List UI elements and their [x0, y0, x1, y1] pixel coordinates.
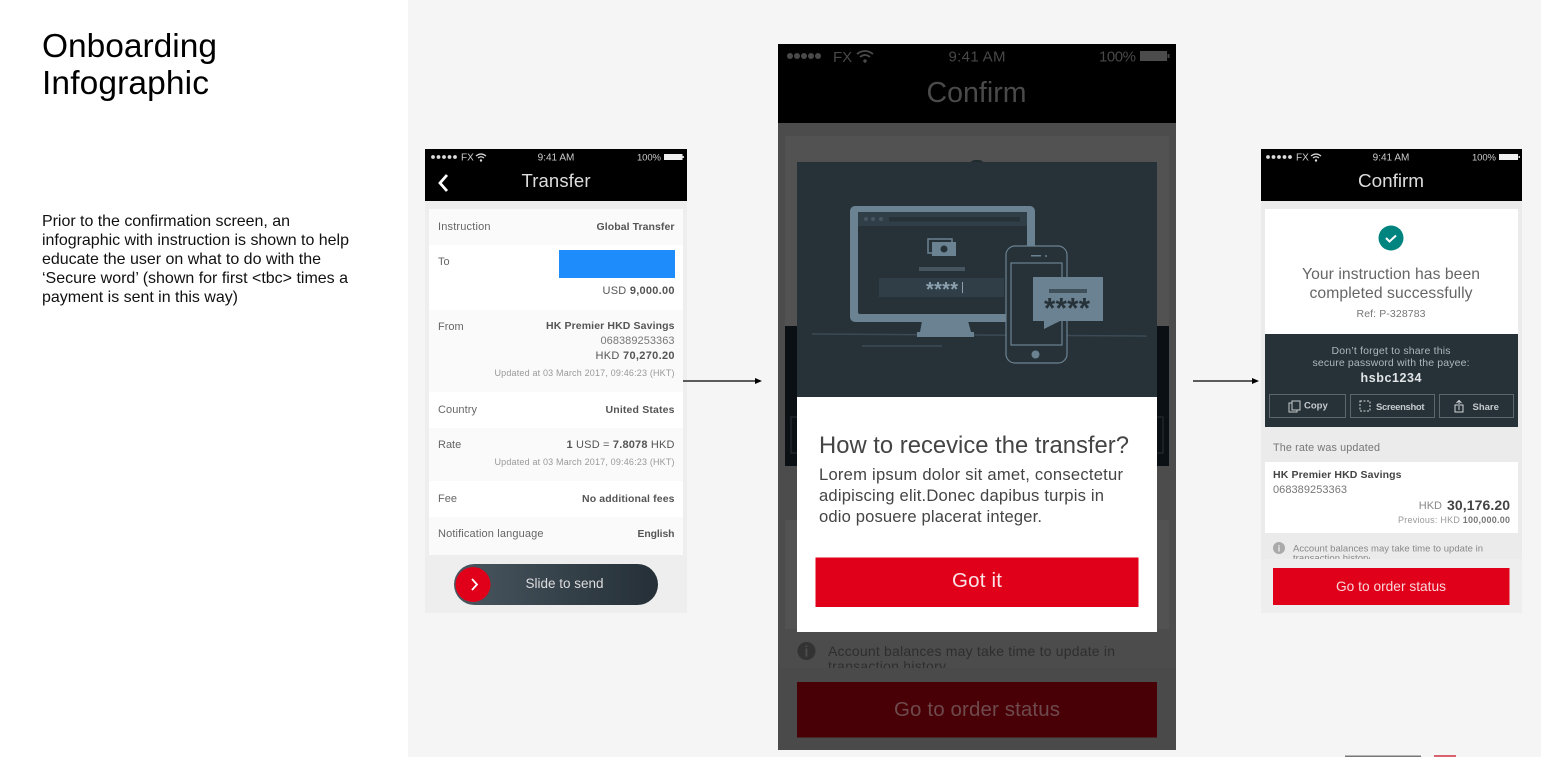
row values: [494, 221, 675, 540]
table rows: [429, 209, 683, 555]
header: confirm dimmed: Confirm: [926, 77, 1026, 109]
dimmed screen background: [778, 136, 1176, 750]
panel: transfer phone screen: [425, 149, 687, 613]
phone: [1006, 246, 1067, 363]
button: share: [1440, 394, 1514, 418]
text block: description: infographic with instruction is shown to help: [42, 232, 349, 249]
header: confirm: [1261, 149, 1522, 201]
account card: HK Premier HKD Savings: [1273, 469, 1402, 481]
row values: HKD 70,270.20: [596, 350, 674, 362]
button: share: Share: [1472, 402, 1499, 413]
header: confirm dimmed: FX: [833, 49, 852, 66]
row labels: Rate: [438, 439, 461, 451]
account card: 068389253363: [1273, 484, 1347, 496]
modal body text: adipiscing elit.Donec dapibus turpis in: [819, 486, 1104, 505]
arrow: first to second screen: [683, 378, 762, 384]
title: Infographic: [42, 65, 209, 102]
success card: completed successfully: [1310, 285, 1473, 302]
row labels: [438, 221, 544, 540]
row labels: From: [438, 321, 464, 333]
info note: transaction history: [1293, 553, 1371, 564]
header: confirm dimmed: 9:41 AM: [948, 48, 1006, 66]
row values: Updated at 03 March 2017, 09:46:23 (HKT): [494, 457, 674, 467]
account card: [1265, 462, 1518, 533]
header: transfer: Transfer: [522, 170, 590, 191]
title: [42, 28, 217, 102]
row labels: Fee: [438, 493, 457, 505]
title: Onboarding: [42, 28, 217, 65]
row values: USD 9,000.00: [602, 285, 674, 297]
success card: [1265, 209, 1518, 334]
text block: description: Prior to the confirmation screen, an: [42, 213, 290, 230]
row values: HK Premier HKD Savings: [546, 320, 675, 332]
illustration: monitor and phone with secure word: [797, 162, 1157, 397]
row labels: Instruction: [438, 221, 490, 233]
modal body text: odio posuere placerat integer.: [819, 507, 1042, 526]
dimmed screen background: Go to order status: [894, 698, 1060, 721]
button: go to order status: [1261, 559, 1522, 613]
success card: Ref: P-328783: [1356, 308, 1426, 320]
text block: description: educate the user on what to do with the: [42, 251, 321, 268]
dimmed screen background: transaction history: [828, 658, 946, 674]
icon: check: [1378, 226, 1404, 250]
row labels: Country: [438, 404, 478, 416]
button: copy: Copy: [1304, 400, 1328, 412]
modal body text: [819, 465, 1123, 526]
panel: onboarding modal phone screen: [778, 44, 1176, 750]
header: confirm: 100%: [1472, 152, 1497, 164]
button: got it: Got it: [952, 569, 1002, 592]
redaction: blue box: [559, 250, 675, 278]
row labels: Notification language: [438, 528, 544, 540]
panel: confirmation phone screen: [1261, 149, 1522, 613]
modal card: [797, 162, 1157, 632]
secure word panel: Don’t forget to share this: [1332, 345, 1450, 357]
success card: Your instruction has been: [1302, 266, 1480, 283]
text block: description: ‘Secure word’ (shown for first <tbc> times a: [42, 270, 348, 287]
button: got it: [816, 558, 1138, 607]
header: confirm dimmed: [778, 44, 1176, 123]
message bubble: ****: [1044, 293, 1091, 325]
row values: 068389253363: [600, 335, 674, 347]
header: confirm: Confirm: [1358, 171, 1424, 192]
row values: Global Transfer: [596, 221, 674, 233]
secure word panel: hsbc1234: [1360, 371, 1422, 385]
header: transfer: 100%: [637, 152, 662, 164]
account card: 30,176.20: [1447, 497, 1510, 513]
button: screenshot: Screenshot: [1376, 402, 1425, 413]
dimmed screen background: i: [804, 644, 809, 660]
info note: i: [1278, 544, 1280, 554]
panel: right grey canvas: [408, 0, 1541, 757]
message bubble: [1033, 277, 1103, 329]
button: screenshot: [1350, 394, 1434, 418]
header: transfer: [425, 149, 687, 201]
header: confirm: FX: [1296, 152, 1309, 164]
modal heading: How to recevice the transfer?: [819, 432, 1129, 459]
account card: Previous: HKD 100,000.00: [1398, 515, 1510, 525]
modal body text: Lorem ipsum dolor sit amet, consectetur: [819, 465, 1123, 484]
header: transfer: 9:41 AM: [538, 152, 574, 164]
rate note: The rate was updated: [1273, 442, 1380, 454]
arrow: second to third screen: [1193, 378, 1259, 384]
text block: description: payment is sent in this way): [42, 289, 238, 306]
logo: clipped HSBC mark: [1345, 755, 1456, 757]
header: confirm dimmed: 100%: [1099, 48, 1136, 66]
row labels: To: [438, 256, 450, 268]
info note: [1273, 542, 1483, 564]
row values: English: [638, 529, 674, 540]
info note: Account balances may take time to update in: [1293, 544, 1483, 554]
secure word panel: [1265, 334, 1518, 427]
row values: No additional fees: [582, 493, 675, 505]
dimmed screen background: Account balances may take time to update in: [828, 643, 1115, 659]
account card: HKD: [1419, 500, 1442, 512]
monitor: [850, 206, 1035, 337]
header: transfer: FX: [461, 152, 474, 164]
secure word panel: secure password with the payee:: [1312, 357, 1470, 369]
text block: description: [42, 213, 349, 306]
header: confirm: 9:41 AM: [1373, 152, 1409, 164]
row values: 1 USD = 7.8078 HKD: [566, 439, 675, 451]
row values: Updated at 03 March 2017, 09:46:23 (HKT): [494, 368, 674, 378]
slide to send control: Slide to send: [526, 576, 604, 591]
button: go to order status: Go to order status: [1336, 579, 1446, 594]
slide to send control: [425, 556, 687, 613]
row values: United States: [606, 404, 675, 416]
monitor: ****: [926, 279, 958, 301]
button: copy: [1270, 394, 1346, 418]
